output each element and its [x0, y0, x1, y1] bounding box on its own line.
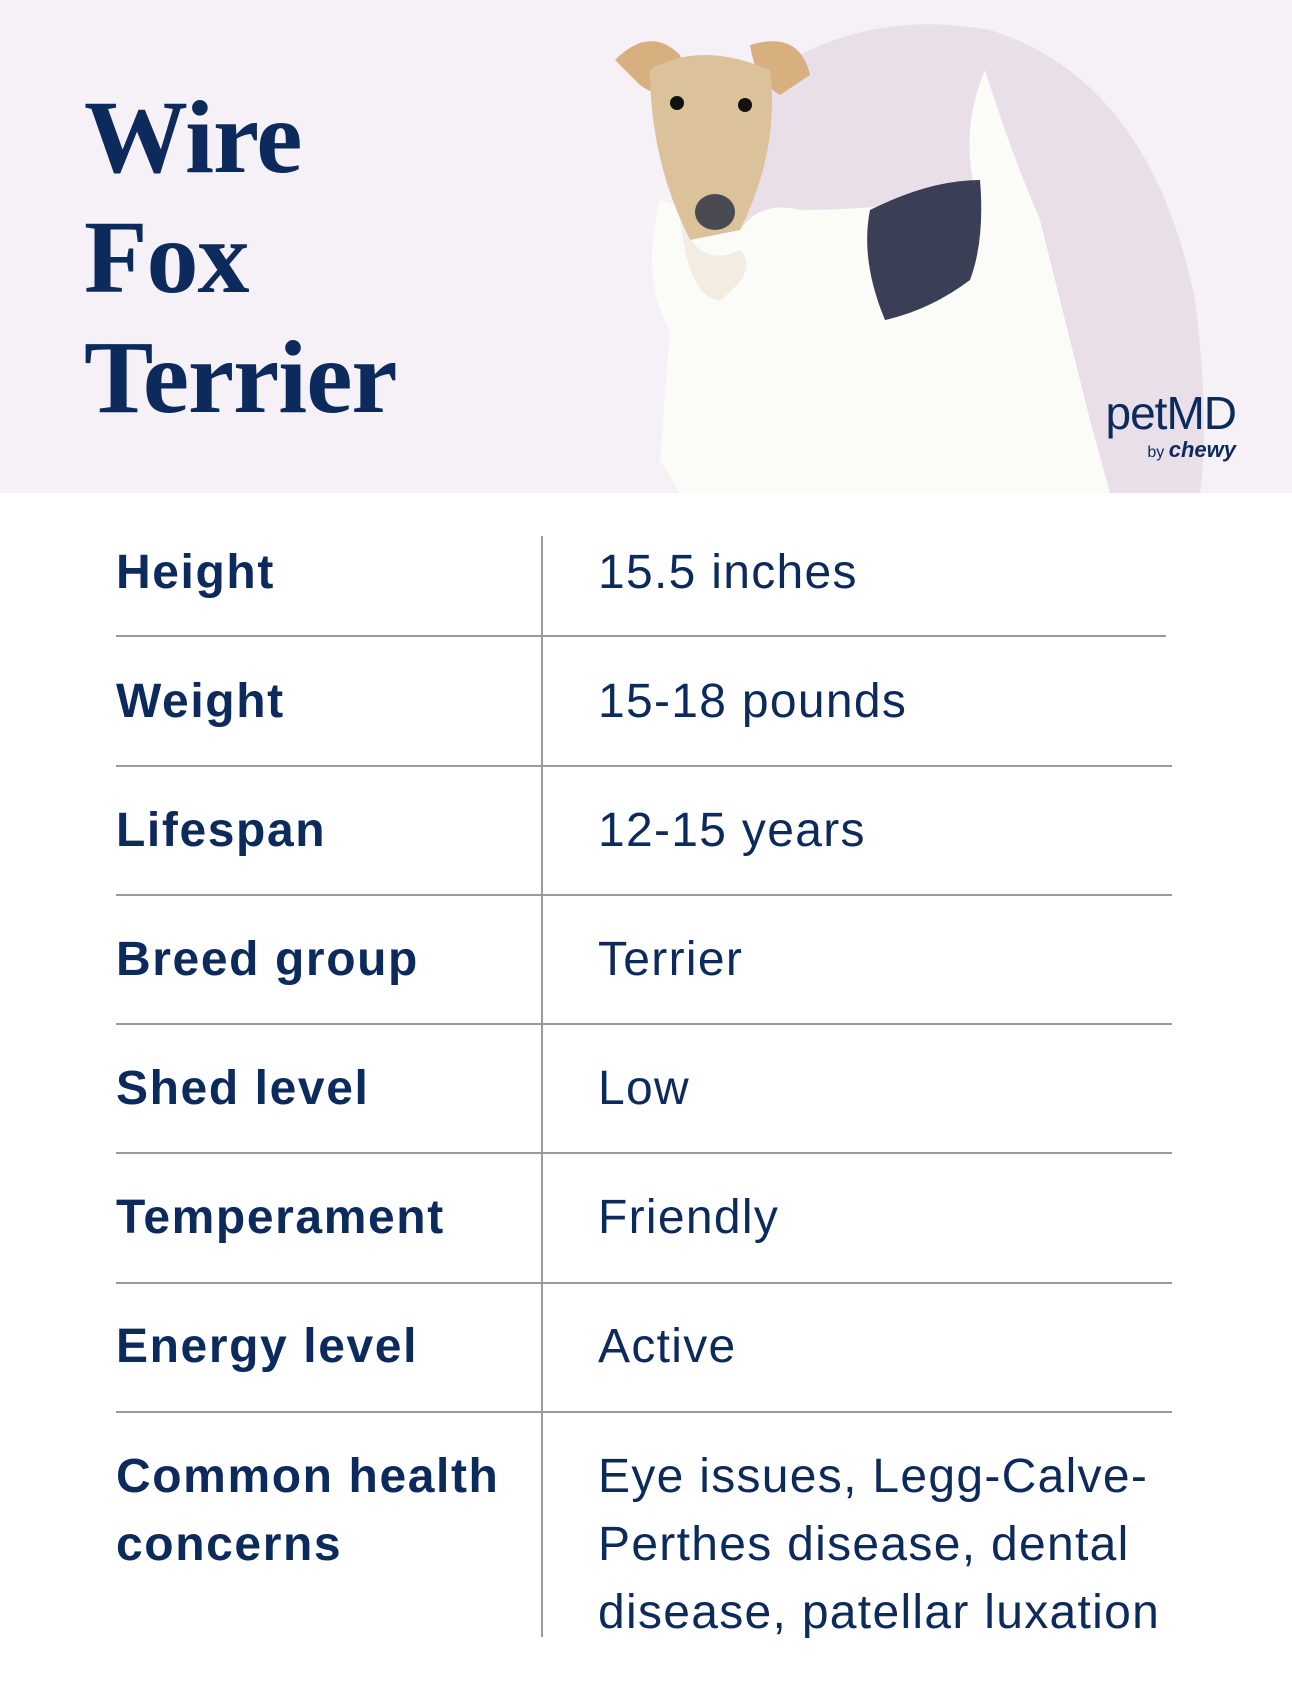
- text: Weight: [116, 675, 285, 728]
- text: Common health: [116, 1450, 499, 1503]
- text: Eye issues, Legg-Calve-: [598, 1450, 1148, 1503]
- text: 15-18 pounds: [598, 675, 907, 728]
- row: energy level: [116, 1320, 737, 1373]
- header banner: [0, 0, 1292, 493]
- logo: petMD by chewy: [1106, 387, 1237, 462]
- title: [84, 80, 397, 435]
- text: Low: [598, 1062, 690, 1115]
- text: Height: [116, 546, 275, 599]
- logo: petMD by chewy: petMD: [1106, 387, 1236, 439]
- row: shed level: [116, 1062, 690, 1115]
- row: temperament: [116, 1191, 779, 1244]
- text: 12-15 years: [598, 804, 866, 857]
- text: concerns: [116, 1518, 342, 1571]
- text: Active: [598, 1320, 737, 1373]
- text: Terrier: [598, 933, 743, 986]
- background blob and dog illustration: [615, 24, 1204, 493]
- text: 15.5 inches: [598, 546, 858, 599]
- title: Fox: [84, 200, 249, 315]
- row: weight: [116, 675, 907, 728]
- row: height: [116, 546, 858, 599]
- column divider: [541, 536, 542, 1637]
- logo: petMD by chewy: by chewy: [1147, 437, 1236, 462]
- text: Temperament: [116, 1191, 445, 1244]
- row: lifespan: [116, 804, 866, 857]
- title: Terrier: [84, 320, 397, 435]
- text: Perthes disease, dental: [598, 1518, 1130, 1571]
- text: Lifespan: [116, 804, 326, 857]
- text: Energy level: [116, 1320, 418, 1373]
- table: [541, 536, 543, 1637]
- text: Friendly: [598, 1191, 779, 1244]
- text: Shed level: [116, 1062, 369, 1115]
- row: health concerns: [116, 1450, 1160, 1639]
- title: Wire: [84, 80, 301, 195]
- text: Breed group: [116, 933, 419, 986]
- row: breed group: [116, 933, 743, 986]
- text: disease, patellar luxation: [598, 1586, 1160, 1639]
